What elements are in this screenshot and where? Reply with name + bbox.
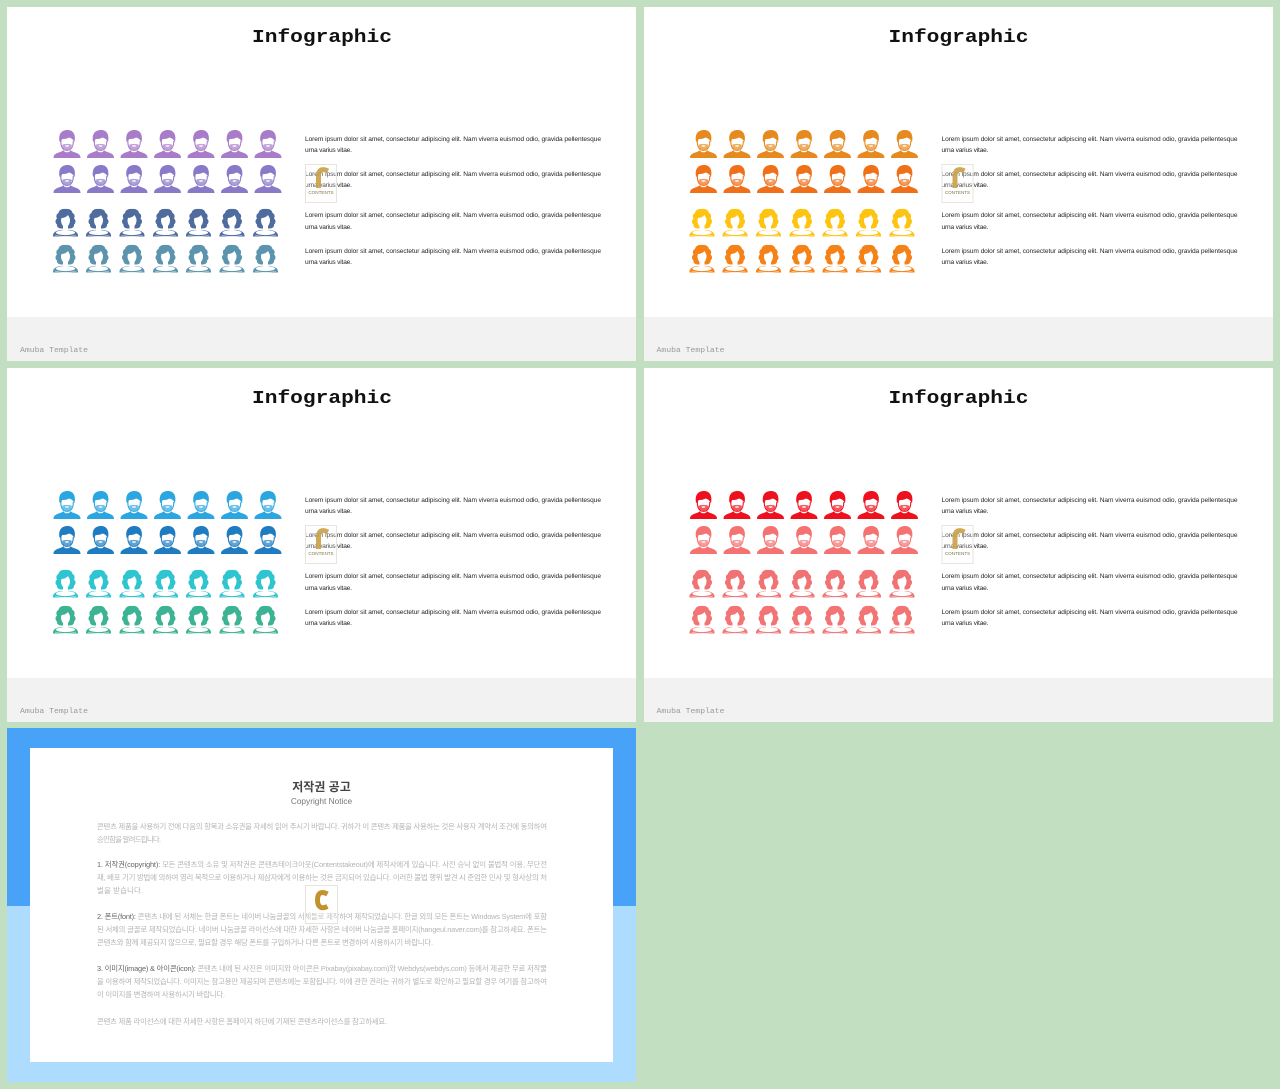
icon row: men violet: [54, 165, 282, 193]
watermark: CONTENTS: [308, 190, 334, 195]
panel: red infographic slide: [644, 368, 1273, 722]
icon row: women navy: [53, 209, 278, 236]
text block: Lorem ipsum dolor sit amet, consectetur adipiscing elit. Nam viverra euismod odio, gravida pellentesque: [305, 248, 601, 255]
title: Infographic: [252, 28, 392, 48]
icon row: men coral: [690, 526, 918, 554]
text block: Lorem ipsum dolor sit amet, consectetur adipiscing elit. Nam viverra euismod odio, gravida pellentesque: [942, 136, 1238, 143]
watermark: [942, 164, 973, 202]
text block: urna varius vitae.: [942, 508, 989, 515]
image and icon paragraph: 3. 이미지(image) & 아이콘(icon): 콘텐츠 내에 된 사진은 이미지와 아이콘은 Pixabay(pixabay.com)와 Webdys(webdys.com) 등에서 제공한 무료 저작물: [97, 964, 547, 973]
text block: [305, 136, 601, 266]
icon row: women green: [53, 606, 278, 634]
text block: Lorem ipsum dolor sit amet, consectetur adipiscing elit. Nam viverra euismod odio, gravida pellentesque: [942, 609, 1238, 616]
text block: urna varius vitae.: [942, 259, 989, 266]
text block: Lorem ipsum dolor sit amet, consectetur adipiscing elit. Nam viverra euismod odio, gravida pellentesque: [305, 609, 601, 616]
watermark: [942, 526, 973, 564]
text block: Lorem ipsum dolor sit amet, consectetur adipiscing elit. Nam viverra euismod odio, gravida pellentesque: [305, 532, 601, 539]
image and icon paragraph: 이 이미지를 변경하여 사용하시기 바랍니다.: [97, 990, 225, 999]
icon row: women coral lower: [689, 606, 915, 634]
icon row: men purple: [54, 130, 282, 158]
panel: orange infographic slide: [644, 7, 1273, 361]
text block: Lorem ipsum dolor sit amet, consectetur adipiscing elit. Nam viverra euismod odio, gravida pellentesque: [942, 212, 1238, 219]
intro paragraph: 승인함을 알려드립니다.: [97, 835, 161, 844]
title: Infographic: [888, 28, 1028, 48]
text block: urna varius vitae.: [305, 543, 352, 550]
text block: urna varius vitae.: [305, 508, 352, 515]
footer label: Amuba Template: [20, 708, 88, 716]
watermark: CONTENTS: [945, 551, 970, 556]
font paragraph: 콘텐츠와 함께 제공되지 않으므로, 필요할 경우 해당 폰트를 구입하거나 다른 폰트로 변경하여 사용하시기 바랍니다.: [97, 938, 433, 947]
text block: [305, 497, 601, 627]
text block: urna varius vitae.: [305, 620, 352, 627]
text block: Lorem ipsum dolor sit amet, consectetur adipiscing elit. Nam viverra euismod odio, gravida pellentesque: [942, 497, 1238, 504]
font paragraph: [97, 912, 547, 947]
intro paragraph: 콘텐츠 제품을 사용하기 전에 다음의 항목과 소유권을 자세히 읽어 주시기 바랍니다. 귀하가 이 콘텐츠 제품을 사용하는 것은 사용자 계약서 조건에 동의하여: [97, 822, 547, 831]
text block: urna varius vitae.: [305, 147, 352, 154]
copyright paragraph: [97, 860, 547, 895]
notice heading: 저작권 공고: [292, 779, 351, 794]
text block: Lorem ipsum dolor sit amet, consectetur adipiscing elit. Nam viverra euismod odio, gravida pellentesque: [942, 171, 1238, 178]
footer label: Amuba Template: [20, 347, 88, 355]
watermark: CONTENTS: [945, 190, 970, 195]
notice subheading: Copyright Notice: [291, 796, 353, 806]
title: Infographic: [888, 389, 1028, 409]
title: Infographic: [252, 389, 392, 409]
text block: urna varius vitae.: [942, 543, 989, 550]
icon row: men red: [690, 491, 918, 519]
icon row: women orange: [689, 245, 915, 272]
text block: urna varius vitae.: [942, 620, 989, 627]
text block: Lorem ipsum dolor sit amet, consectetur adipiscing elit. Nam viverra euismod odio, gravida pellentesque: [305, 497, 601, 504]
text block: urna varius vitae.: [305, 224, 352, 231]
icon row: women coral: [689, 570, 915, 598]
watermark: CONTENTS: [308, 551, 334, 556]
panel: blue infographic slide: [7, 368, 636, 722]
font paragraph: 2. 폰트(font): 콘텐츠 내에 된 서체는 한글 폰트는 네이버 나눔글꼴의 서체들로 제작하여 제작되었습니다. 한글 외의 모든 폰트는 Windows System에 포함: [97, 912, 547, 921]
footer label: Amuba Template: [656, 708, 724, 716]
footer label: Amuba Template: [656, 347, 724, 355]
icon row: women cyan: [53, 570, 278, 598]
text block: Lorem ipsum dolor sit amet, consectetur adipiscing elit. Nam viverra euismod odio, gravida pellentesque: [942, 248, 1238, 255]
icon row: women yellow: [689, 209, 915, 236]
text block: Lorem ipsum dolor sit amet, consectetur adipiscing elit. Nam viverra euismod odio, gravida pellentesque: [942, 532, 1238, 539]
panel: copyright notice slide: [7, 728, 636, 1082]
watermark: [306, 886, 338, 924]
text block: urna varius vitae.: [942, 224, 989, 231]
copyright paragraph: 1. 저작권(copyright): 모든 콘텐츠의 소유 및 저작권은 콘텐츠테이크아웃(Contentstakeout)에 제작사에게 있습니다. 사전 승낙 없이 불법적 이용, 무단전: [97, 860, 547, 869]
copyright paragraph: 벌을 받습니다.: [97, 886, 143, 895]
icon row: men sky blue: [54, 491, 282, 519]
text block: Lorem ipsum dolor sit amet, consectetur adipiscing elit. Nam viverra euismod odio, gravida pellentesque: [942, 573, 1238, 580]
text block: [942, 497, 1238, 627]
image and icon paragraph: [97, 964, 547, 999]
text block: urna varius vitae.: [305, 259, 352, 266]
icon row: men amber: [690, 130, 918, 158]
text block: Lorem ipsum dolor sit amet, consectetur adipiscing elit. Nam viverra euismod odio, gravida pellentesque: [305, 171, 601, 178]
text block: Lorem ipsum dolor sit amet, consectetur adipiscing elit. Nam viverra euismod odio, gravida pellentesque: [305, 136, 601, 143]
text block: urna varius vitae.: [942, 585, 989, 592]
license paragraph: 콘텐츠 제품 라이선스에 대한 자세한 사항은 홈페이지 하단에 기재된 콘텐츠라이선스를 참고하세요.: [97, 1017, 387, 1026]
watermark: [306, 526, 336, 564]
intro paragraph: [97, 822, 547, 844]
icon row: men orange: [690, 165, 918, 193]
image and icon paragraph: 을 이용하여 제작되었습니다. 이미지는 참고용만 제공되며 콘텐츠에는 포함됩니다. 이에 관한 권리는 귀하가 별도로 확인하고 필요할 경우 여기를 참고하여: [97, 977, 547, 986]
text block: Lorem ipsum dolor sit amet, consectetur adipiscing elit. Nam viverra euismod odio, gravida pellentesque: [305, 212, 601, 219]
watermark: [306, 164, 336, 202]
text block: urna varius vitae.: [305, 585, 352, 592]
text block: urna varius vitae.: [942, 147, 989, 154]
copyright paragraph: 재, 배포 기기 방법에 의하여 영리 목적으로 이용하거나 제삼자에게 이용하는 것은 금지되어 있습니다. 이러한 불법 행위 발견 시 준엄한 민사 및 형사상의 처: [97, 873, 547, 882]
font paragraph: 된 서체의 글꼴로 제작되었습니다. 네이버 나눔글꼴 라이선스에 대한 자세한 사항은 네이버 나눔글꼴 홈페이지(hangeul.naver.com)를 참고하세요. 폰트는: [97, 925, 547, 934]
panel: purple infographic slide: [7, 7, 636, 361]
text block: urna varius vitae.: [305, 182, 352, 189]
text block: Lorem ipsum dolor sit amet, consectetur adipiscing elit. Nam viverra euismod odio, gravida pellentesque: [305, 573, 601, 580]
text block: [942, 136, 1238, 266]
icon row: men blue: [54, 526, 282, 554]
icon row: women teal: [53, 245, 278, 272]
text block: urna varius vitae.: [942, 182, 989, 189]
